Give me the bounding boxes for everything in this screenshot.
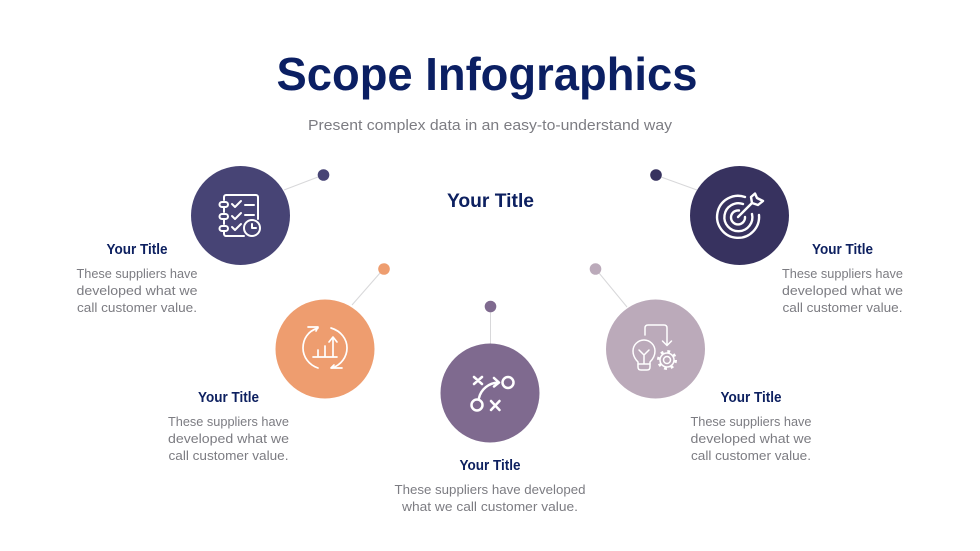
text 5: call customer value. [782, 300, 902, 315]
icon: target with arrow [717, 194, 763, 238]
dot 1 [318, 169, 329, 181]
text 5 [782, 266, 903, 315]
dot 3 [485, 301, 496, 312]
text 3: what we call customer value. [401, 499, 578, 514]
text 2 [168, 414, 289, 463]
center heading: Your Title [447, 190, 534, 212]
icon: checklist with clock [220, 195, 260, 236]
text 5: These suppliers have [782, 266, 903, 281]
icon: chart in cycle arrows [303, 327, 347, 368]
icon: play diagram [472, 377, 514, 410]
text 4: These suppliers have [690, 414, 812, 429]
connector 5 [661, 177, 697, 190]
panel: item 1 checklist [76, 166, 329, 315]
icon: lightbulb and gear [633, 325, 676, 370]
panel: item 3 strategy [394, 301, 586, 514]
text 4: call customer value. [691, 448, 811, 463]
circle 3 [440, 344, 540, 442]
connector 1 [284, 177, 318, 190]
panel: item 4 idea process [590, 263, 812, 463]
connector 3 [490, 312, 492, 344]
panel: item 5 target [650, 166, 903, 315]
connector 2 [352, 273, 380, 305]
text 2: These suppliers have [168, 414, 289, 429]
heading 4: Your Title [720, 390, 782, 406]
connector 4 [599, 273, 627, 307]
circle 4 [606, 300, 705, 398]
text 1: call customer value. [77, 300, 197, 315]
panel: item 2 growth cycle [168, 263, 390, 463]
text 2: developed what we [168, 431, 289, 446]
title: Scope Infographics [276, 48, 698, 100]
heading 3: Your Title [460, 458, 520, 474]
text 4: developed what we [690, 431, 812, 446]
circle 2 [276, 300, 374, 398]
text 5: developed what we [782, 283, 903, 298]
dot 5 [650, 169, 662, 181]
text 1 [76, 266, 198, 315]
heading 5: Your Title [812, 242, 873, 258]
heading 2: Your Title [198, 390, 259, 406]
text 4 [690, 414, 812, 463]
subtitle: Present complex data in an easy-to-understand way [308, 118, 673, 134]
circle 1 [191, 166, 290, 265]
text 3 [394, 482, 586, 514]
heading 1: Your Title [106, 242, 168, 258]
text 3: These suppliers have developed [394, 482, 586, 497]
circle 5 [690, 166, 789, 265]
text 1: These suppliers have [76, 266, 198, 281]
dot 4 [590, 263, 601, 275]
dot 2 [378, 263, 390, 275]
text 1: developed what we [76, 283, 198, 298]
text 2: call customer value. [168, 448, 288, 463]
